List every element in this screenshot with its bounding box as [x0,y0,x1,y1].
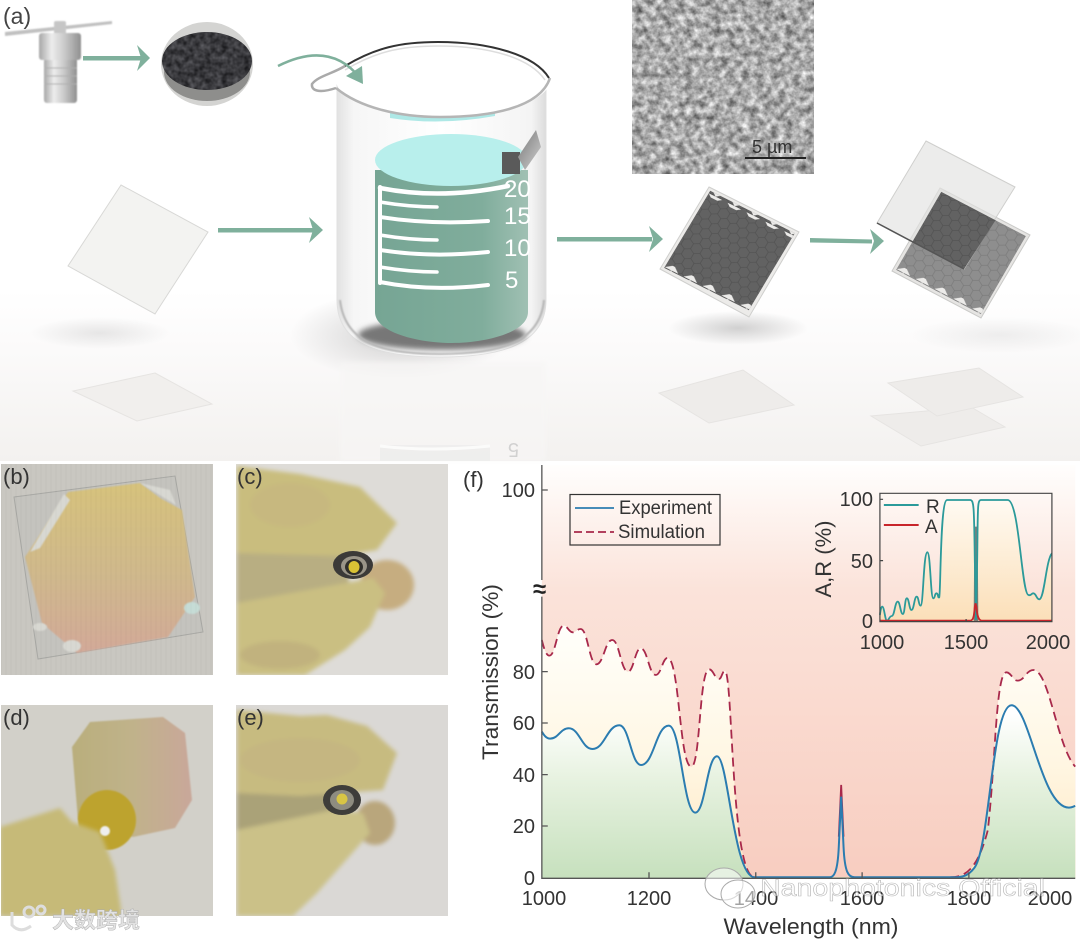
simulation curve [542,626,755,877]
label (b): (b) [3,464,30,489]
panel (b): film on fabric [1,464,213,675]
scale bar [745,137,806,159]
graduation numbers: 20 [504,176,531,203]
area under simulation [542,626,1075,878]
graduation numbers: 15 [504,203,531,230]
inset tick labels and titles: 50 [851,551,873,573]
panel (f): transmission chart [463,465,1075,939]
film [72,717,192,837]
watermark: Nanophotonics Official [705,868,1045,908]
inset tick labels and titles: R [926,497,940,518]
glass plate [14,476,203,659]
y tick labels [502,480,535,890]
film residue at corners [30,483,200,652]
x axis title: Wavelength (nm) [724,914,898,939]
y tick labels: 20 [513,816,535,838]
legend: Experiment [619,498,713,519]
axis break mark: ≈ [533,576,546,603]
beaker reflection [340,362,546,461]
arrow: autoclave to powder [83,45,150,71]
beaker interior opening [336,43,550,117]
sample holder clip [502,130,541,174]
area under experiment [542,705,1075,878]
arrow: substrate to beaker [218,217,323,243]
teal liquid sliver [390,112,495,122]
y tick labels: 40 [513,765,535,787]
beaker reflection: 5 [508,438,519,460]
inset frame and ticks [880,493,1052,622]
axes [542,465,1075,878]
lower hexagonal film [892,188,1030,318]
label (f): (f) [463,467,484,492]
y tick labels: 80 [513,662,535,684]
overlap region [913,192,996,269]
label (c): (c) [237,464,263,489]
SEM micrograph [632,0,814,174]
legend [570,494,720,545]
hexagonal film on glass [660,187,799,317]
arrow: beaker to hexagonal film [557,226,663,252]
metal ring [333,551,373,579]
inset tick labels and titles: 0 [862,611,873,633]
disc hole [100,826,110,836]
inset tick labels and titles [811,489,1070,654]
floor shadows [30,290,1080,380]
glove [237,710,397,916]
watermark: 大数跨境 [12,906,140,933]
icon: hydrothermal autoclave [5,21,112,103]
watermark: Nanophotonics Official: Nanophotonics Official [760,875,1045,902]
glove [237,466,414,675]
x tick labels: 1000 [522,888,566,910]
chart areas and curves [542,465,1075,878]
teal cylinder [375,134,528,343]
experiment curve [542,705,1075,877]
inset plot [880,493,1052,622]
y tick labels: 60 [513,713,535,735]
legend: Simulation [618,522,705,543]
glass edge [877,223,964,269]
arrow: film to stacked film [810,229,884,254]
inset tick labels and titles: 1000 [860,632,904,654]
inset tick labels and titles: A [925,517,938,538]
label (a): (a) [3,3,31,29]
label (e): (e) [237,705,264,730]
y axis title: Transmission (%) [478,584,503,760]
glass substrate [68,185,208,314]
x tick labels: 1800 [947,888,991,910]
area under R [880,500,1052,622]
panel (a): fabrication schematic [0,0,1080,461]
graduation marks [380,186,508,288]
inset tick labels and titles: 2000 [1026,632,1070,654]
yellow disc [78,790,136,850]
A curve [880,603,1052,621]
simulation resonance peak [839,785,844,837]
graduation numbers [504,176,531,294]
inset tick labels and titles: A,R (%) [811,520,836,598]
x tick labels: 1200 [627,888,671,910]
panel (d): film held by hand [0,705,213,916]
assembled stack [877,141,1030,318]
R curve [880,500,1052,621]
beaker rim [312,42,550,117]
dark resonance band [974,527,978,622]
inset tick labels and titles: 1500 [944,632,988,654]
coloured film [25,483,195,653]
curved pouring arrow [278,55,363,84]
beaker body [337,85,546,357]
x tick labels: 1400 [734,888,778,910]
graduation numbers: 10 [504,235,531,262]
graduation numbers: 5 [505,267,518,294]
inset legend lines [884,504,919,506]
film reflections [659,368,1023,446]
y tick labels: 0 [524,868,535,890]
metal ring [323,785,361,815]
glove [0,808,122,916]
top glass cover [877,141,1015,269]
substrate reflection [73,373,212,421]
icon: chat bubbles [705,868,755,908]
y tick labels: 100 [502,480,535,502]
inset tick labels and titles: 100 [840,489,873,511]
simulation curve, right band [950,670,1075,877]
icon: dish of black powder [160,22,254,106]
reflective floor [0,290,1080,461]
scale bar: 5 µm [752,137,792,157]
watermark: 大数跨境: 大数跨境 [52,908,140,933]
x tick labels: 1600 [840,888,884,910]
label (d): (d) [3,705,30,730]
beaker with cylinder [312,42,550,461]
panel (e): gloved hand holding ring [236,705,448,916]
icon: logo [12,906,45,930]
x tick labels [522,888,1072,910]
x tick labels: 2000 [1028,888,1072,910]
panel (c): gloved hand holding ring [236,464,448,675]
